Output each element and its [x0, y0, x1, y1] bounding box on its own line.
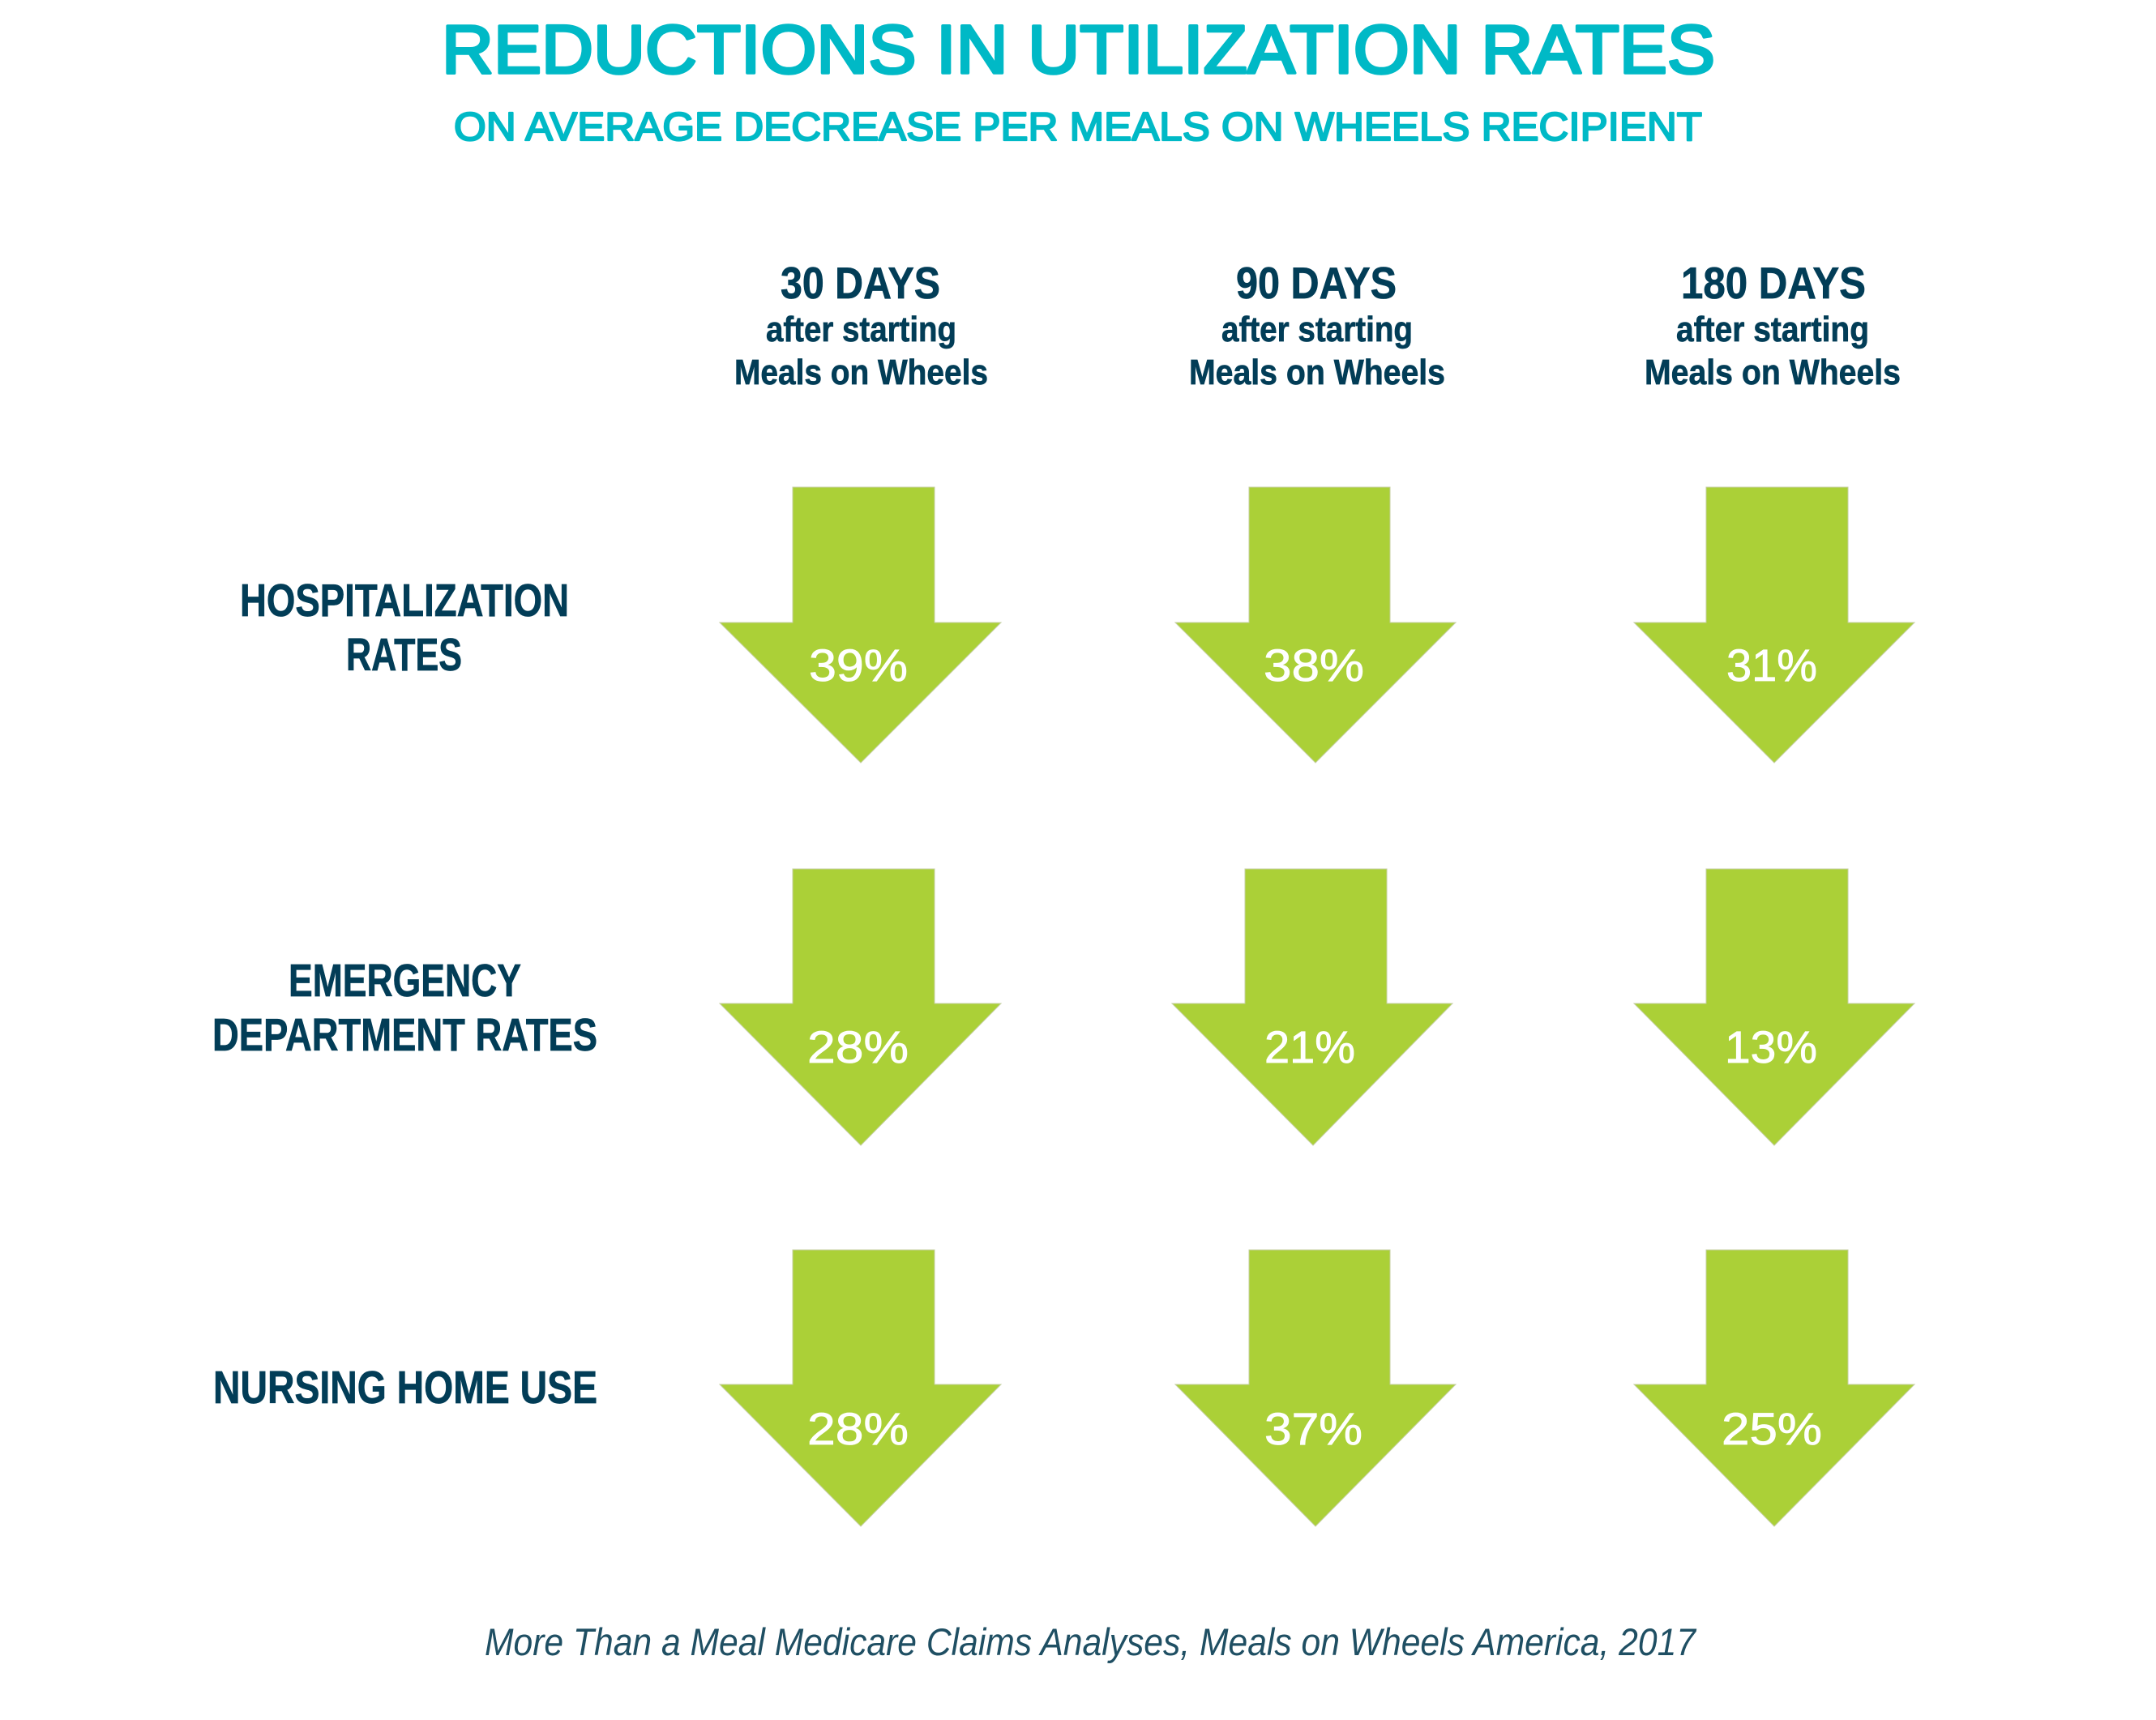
arrow: hospitalization 90 days 38%: 38%: [1264, 640, 1364, 691]
arrow: emergency 90 days 21%: 21%: [1264, 1021, 1355, 1072]
column header: 30 days: after starting: [766, 310, 956, 349]
row label: nursing home use: NURSING HOME USE: [213, 1362, 597, 1414]
arrow: nursing home 180 days 25%: 25%: [1722, 1403, 1822, 1454]
subtitle: ON AVERAGE DECREASE PER MEALS ON WHEELS RECIPIENT: [454, 105, 1702, 149]
row label: hospitalization rates: RATES: [346, 629, 462, 681]
column header: 180 days: [1645, 258, 1901, 392]
row label: emergency department rates: DEPARTMENT RATES: [212, 1009, 597, 1061]
column header: 180 days: 180 DAYS: [1681, 258, 1866, 308]
arrow: nursing home 90 days 37%: 37%: [1264, 1403, 1362, 1454]
arrow: nursing home 90 days 37%: [1175, 1250, 1456, 1526]
column header: 90 days: Meals on Wheels: [1189, 353, 1445, 392]
arrow: nursing home 30 days 28%: 28%: [807, 1403, 909, 1454]
column header: 90 days: [1189, 258, 1445, 392]
column header: 30 days: 30 DAYS: [781, 258, 940, 308]
source footnote: More Than a Meal Medicare Claims Analyses, Meals on Wheels America, 2017: [485, 1620, 1697, 1663]
column header: 180 days: after starting: [1676, 310, 1869, 349]
column header: 30 days: Meals on Wheels: [734, 353, 988, 392]
column header: 90 days: after starting: [1221, 310, 1413, 349]
arrow: hospitalization 30 days 39%: 39%: [809, 640, 908, 691]
column header: 180 days: Meals on Wheels: [1645, 353, 1901, 392]
arrow: nursing home 30 days 28%: [720, 1250, 1001, 1526]
arrow: emergency 30 days 28%: 28%: [807, 1021, 909, 1072]
arrow: hospitalization 180 days 31%: 31%: [1726, 640, 1817, 691]
column header: 30 days: [734, 258, 988, 392]
arrow: hospitalization 90 days 38%: [1175, 487, 1456, 763]
row label: hospitalization rates: HOSPITALIZATION: [240, 575, 569, 627]
row label: emergency department rates: EMERGENCY: [289, 955, 521, 1007]
arrow: emergency 180 days 13%: [1634, 869, 1914, 1145]
arrow: emergency 180 days 13%: 13%: [1725, 1021, 1817, 1072]
arrow: nursing home 180 days 25%: [1634, 1250, 1914, 1526]
title: REDUCTIONS IN UTILIZATION RATES: [442, 11, 1715, 88]
row label: emergency department rates: [212, 955, 597, 1061]
arrow: emergency 90 days 21%: [1172, 869, 1452, 1145]
arrow: emergency 30 days 28%: [720, 869, 1001, 1145]
arrow: hospitalization 180 days 31%: [1634, 487, 1914, 763]
row label: hospitalization rates: [240, 575, 569, 681]
column header: 90 days: 90 DAYS: [1236, 258, 1397, 308]
arrow: hospitalization 30 days 39%: [720, 487, 1001, 763]
